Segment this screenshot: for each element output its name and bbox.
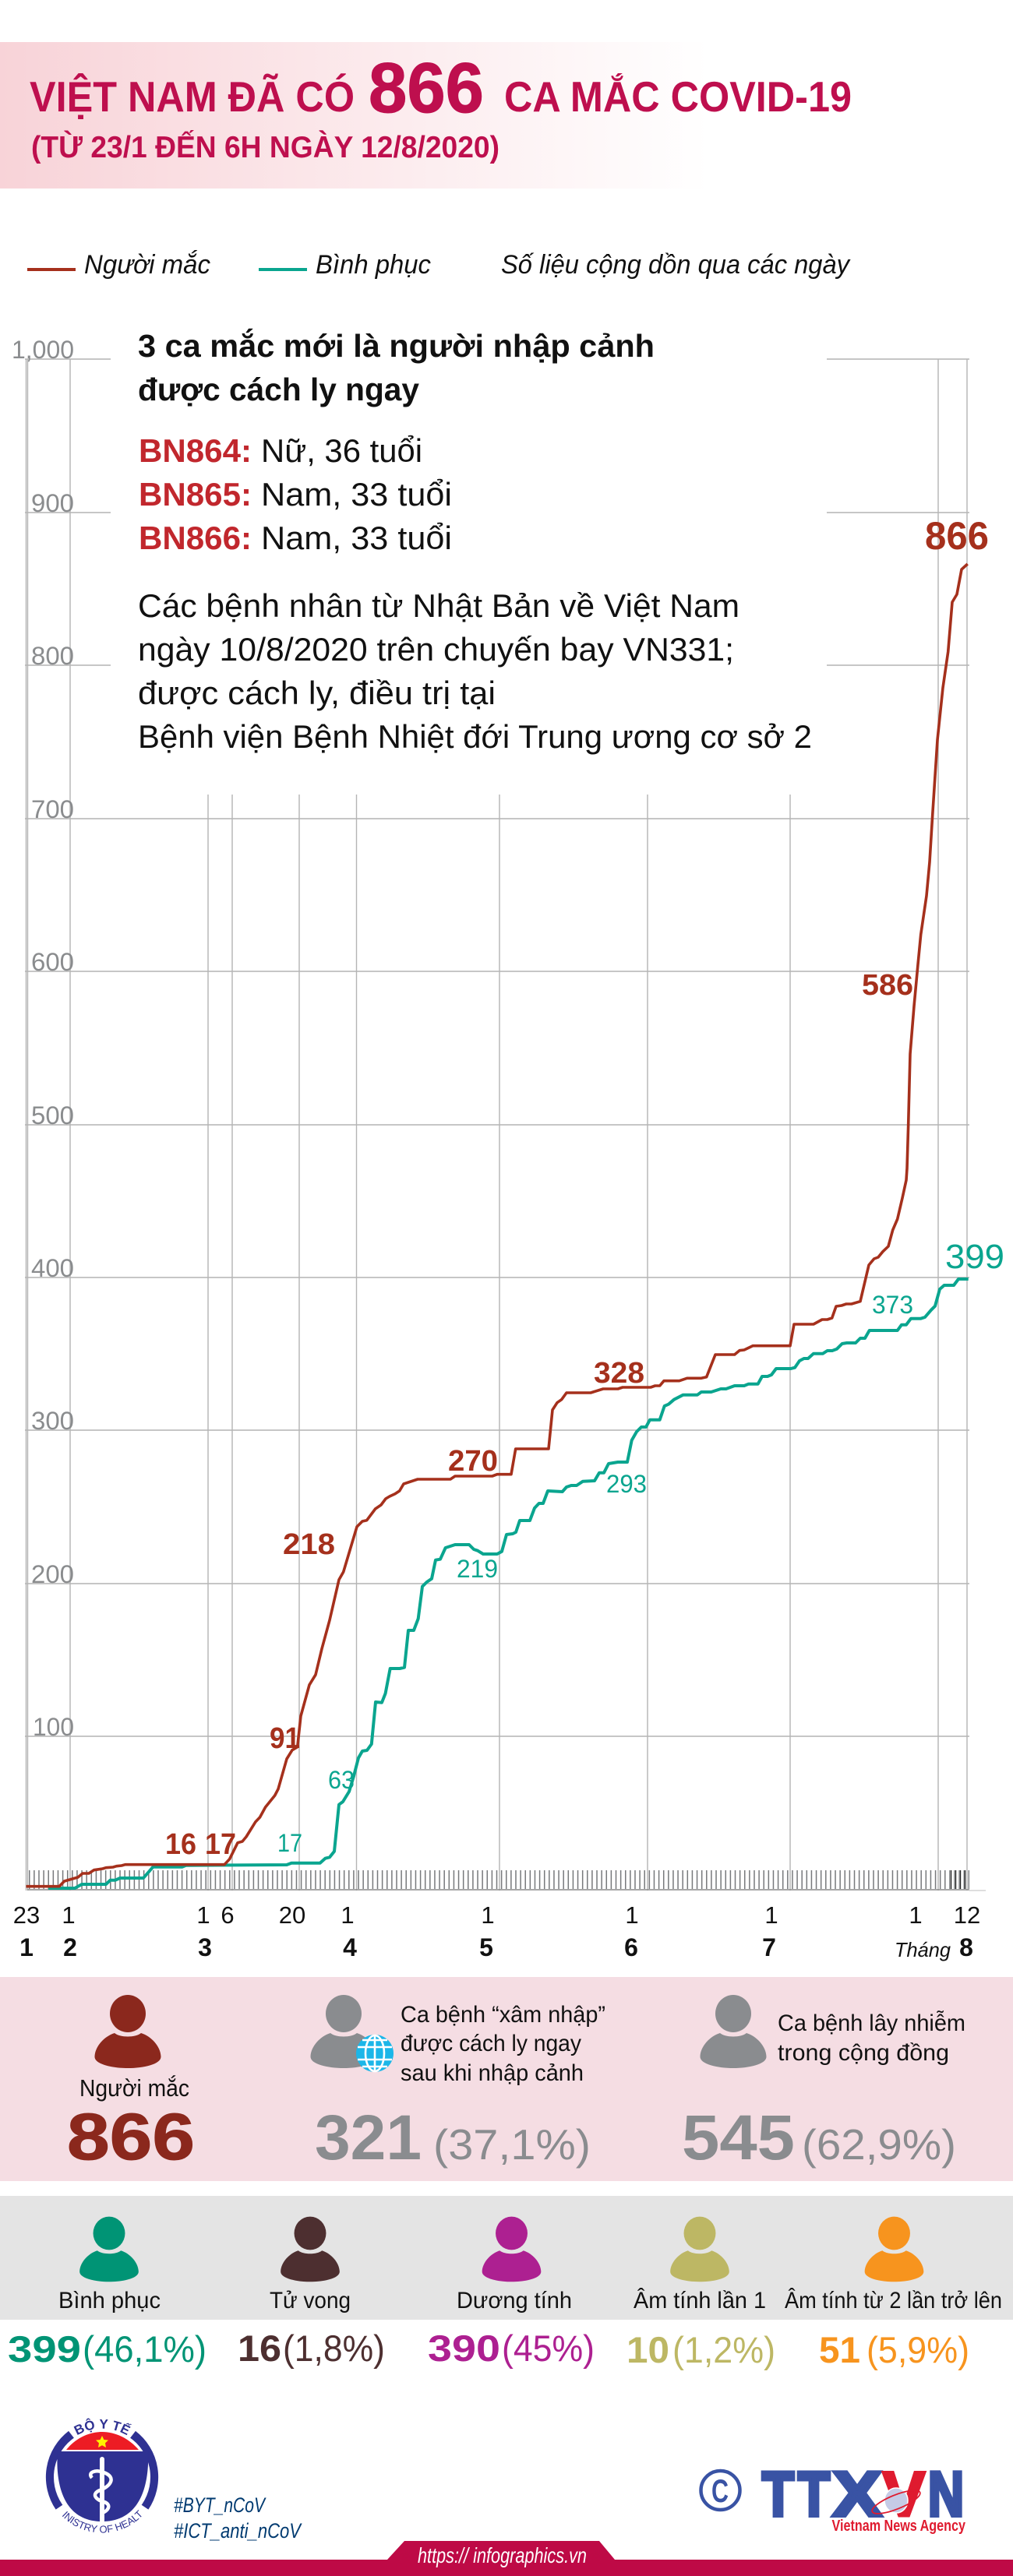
- title: VIỆT NAM ĐÃ CÓ: [30, 72, 355, 121]
- heading: được cách ly ngay: [138, 372, 419, 407]
- icon: imported case: [310, 1995, 394, 2072]
- status: recovered: (46,1%): [83, 2328, 206, 2370]
- legend: Số liệu cộng dồn qua các ngày: [501, 250, 851, 280]
- status: negative twice or more: [785, 2217, 1002, 2370]
- x axis day labels: 1: [625, 1901, 639, 1929]
- title: CA MẮC COVID-19: [504, 72, 852, 121]
- value: imported cases: (37,1%): [433, 2120, 591, 2169]
- patient list: [139, 432, 452, 556]
- confirmed value labels: 17: [205, 1828, 236, 1861]
- label: community cases: [778, 2010, 965, 2066]
- icon: community case: [700, 1995, 767, 2068]
- confirmed value labels: 328: [594, 1357, 644, 1390]
- legend: Người mắc: [84, 250, 210, 280]
- legend: [27, 250, 851, 280]
- value: community cases: 545: [682, 2102, 795, 2173]
- y axis labels: 300: [31, 1407, 74, 1435]
- recovered value labels: 219: [457, 1555, 498, 1583]
- x axis day labels: 6: [221, 1901, 235, 1929]
- status: positive: [428, 2217, 595, 2369]
- status: recovered: [8, 2217, 206, 2370]
- status: positive: (45%): [502, 2328, 595, 2369]
- patient list: Nam, 33 tuổi: [261, 520, 452, 556]
- recovered value labels: 373: [872, 1291, 913, 1319]
- confirmed value labels: 218: [283, 1528, 335, 1561]
- description: ngày 10/8/2020 trên chuyến bay VN331;: [138, 631, 734, 668]
- description: [138, 587, 812, 755]
- status: negative once: Âm tính lần 1: [634, 2288, 766, 2313]
- x axis day labels: 12: [954, 1901, 980, 1929]
- logo: TTXVN: Vietnam News Agency: [832, 2518, 966, 2535]
- icon: copyright: [701, 2471, 740, 2510]
- value: community cases: [682, 2102, 956, 2173]
- value: imported cases: 321: [315, 2102, 422, 2173]
- status: negative twice or more: 51: [819, 2329, 860, 2370]
- patient list: BN865:: [139, 476, 252, 513]
- logo: ministry of health: [45, 2418, 159, 2533]
- value: imported cases: [315, 2102, 591, 2173]
- recovered value labels: 293: [606, 1470, 647, 1498]
- logo: ministry of health: BỘ Y TẾ: [73, 2418, 132, 2435]
- title: [30, 49, 852, 128]
- day ticks: [27, 1880, 986, 1891]
- label: imported cases: Ca bệnh “xâm nhập”: [401, 2002, 605, 2028]
- y axis labels: 600: [31, 948, 74, 976]
- x axis month labels: 7: [762, 1933, 776, 1961]
- x axis day labels: 1: [481, 1901, 495, 1929]
- x axis day labels: [13, 1901, 980, 1929]
- x axis day labels: 1: [62, 1901, 76, 1929]
- legend: Bình phục: [316, 250, 431, 280]
- status: negative twice or more: (5,9%): [867, 2329, 969, 2370]
- x axis month labels: 3: [198, 1933, 212, 1961]
- recovered value labels: [277, 1238, 1004, 1857]
- x axis day labels: 1: [341, 1901, 355, 1929]
- status: deaths: 16: [238, 2328, 281, 2369]
- icon: copyright: C: [711, 2472, 729, 2509]
- logo: TTXVN: [762, 2460, 966, 2535]
- header band: [0, 42, 1013, 189]
- logo: TTXVN: X: [833, 2460, 881, 2530]
- text block: new cases: [138, 328, 812, 755]
- icon: patient: [94, 1995, 161, 2068]
- recovered line: [48, 1279, 969, 1888]
- x axis day labels: 20: [279, 1901, 305, 1929]
- label: community cases: Ca bệnh lây nhiễm: [778, 2010, 965, 2036]
- y axis labels: [12, 336, 74, 1741]
- status: recovered: 399: [8, 2328, 81, 2370]
- recovered value labels: 399: [945, 1238, 1004, 1276]
- status: positive: Dương tính: [457, 2288, 572, 2313]
- label: community cases: trong cộng đồng: [778, 2040, 949, 2066]
- status: deaths: [238, 2217, 385, 2369]
- description: được cách ly, điều trị tại: [138, 675, 496, 711]
- heading: [138, 328, 655, 407]
- panel: case origin: [0, 1977, 1013, 2181]
- status: negative once: 10: [627, 2329, 669, 2370]
- month caption: Tháng: [895, 1938, 951, 1961]
- x axis day labels: 1: [909, 1901, 923, 1929]
- recovered value labels: 17: [277, 1829, 302, 1857]
- logo: TTXVN: T: [798, 2460, 830, 2530]
- x axis day labels: 1: [196, 1901, 210, 1929]
- x axis month labels: 6: [624, 1933, 638, 1961]
- patient list: BN866:: [139, 520, 252, 556]
- status: recovered: Bình phục: [58, 2288, 161, 2313]
- footer url: https:// infographics.vn: [418, 2543, 587, 2567]
- description: Bệnh viện Bệnh Nhiệt đới Trung ương cơ sở 2: [138, 718, 812, 755]
- hashtags: [174, 2493, 302, 2543]
- confirmed value labels: [165, 514, 989, 1861]
- patient list: BN864:: [139, 432, 252, 469]
- patient list: Nữ, 36 tuổi: [261, 432, 422, 469]
- confirmed value labels: 270: [448, 1445, 498, 1478]
- y axis labels: 800: [31, 642, 74, 670]
- value: community cases: (62,9%): [802, 2120, 956, 2169]
- x axis month labels: 5: [479, 1933, 493, 1961]
- x axis day labels: 1: [764, 1901, 778, 1929]
- x axis month labels: 1: [19, 1933, 34, 1961]
- logo: TTXVN: V: [883, 2460, 925, 2530]
- patient list: Nam, 33 tuổi: [261, 476, 452, 513]
- x axis month labels: [19, 1933, 973, 1961]
- status: negative once: (1,2%): [672, 2329, 775, 2370]
- confirmed value labels: 16: [165, 1828, 196, 1861]
- y axis labels: 900: [31, 489, 74, 517]
- confirmed value labels: 91: [270, 1722, 300, 1755]
- x axis day labels: 23: [13, 1901, 40, 1929]
- footer band: [0, 2541, 1013, 2576]
- hashtags: #BYT_nCoV: [174, 2493, 266, 2517]
- logo: TTXVN: N: [928, 2460, 964, 2530]
- line chart: [12, 336, 1004, 1961]
- confirmed value labels: 866: [925, 514, 989, 558]
- status: deaths: (1,8%): [283, 2328, 385, 2369]
- panel: patient status: [0, 2196, 1013, 2370]
- x axis month labels: 2: [63, 1933, 77, 1961]
- title: 866: [369, 49, 484, 128]
- logo: TTXVN: T: [762, 2460, 794, 2530]
- y axis labels: 200: [31, 1560, 74, 1588]
- label: imported cases: được cách ly ngay: [401, 2031, 581, 2056]
- label: imported cases: [401, 2002, 605, 2086]
- status: positive: 390: [428, 2328, 500, 2369]
- x axis month labels: 4: [343, 1933, 357, 1961]
- recovered value labels: 63: [328, 1766, 355, 1794]
- hashtags: #ICT_anti_nCoV: [174, 2519, 302, 2543]
- confirmed value labels: 586: [862, 969, 913, 1002]
- status: negative once: [627, 2217, 775, 2370]
- description: Các bệnh nhân từ Nhật Bản về Việt Nam: [138, 587, 739, 624]
- y axis labels: 500: [31, 1101, 74, 1129]
- label: imported cases: sau khi nhập cảnh: [401, 2060, 584, 2086]
- label: patients: Người mắc: [79, 2074, 189, 2102]
- y axis labels: 1,000: [12, 336, 74, 364]
- y axis labels: 100: [33, 1713, 74, 1741]
- heading: 3 ca mắc mới là người nhập cảnh: [138, 328, 655, 364]
- subtitle: (TỪ 23/1 ĐẾN 6H NGÀY 12/8/2020): [31, 130, 499, 164]
- confirmed cases line: [26, 564, 968, 1887]
- total patients: 866: [67, 2100, 195, 2173]
- x axis month labels: 8: [959, 1933, 973, 1961]
- y axis labels: 400: [31, 1254, 74, 1282]
- status: deaths: Tử vong: [270, 2288, 351, 2313]
- y axis labels: 700: [31, 795, 74, 823]
